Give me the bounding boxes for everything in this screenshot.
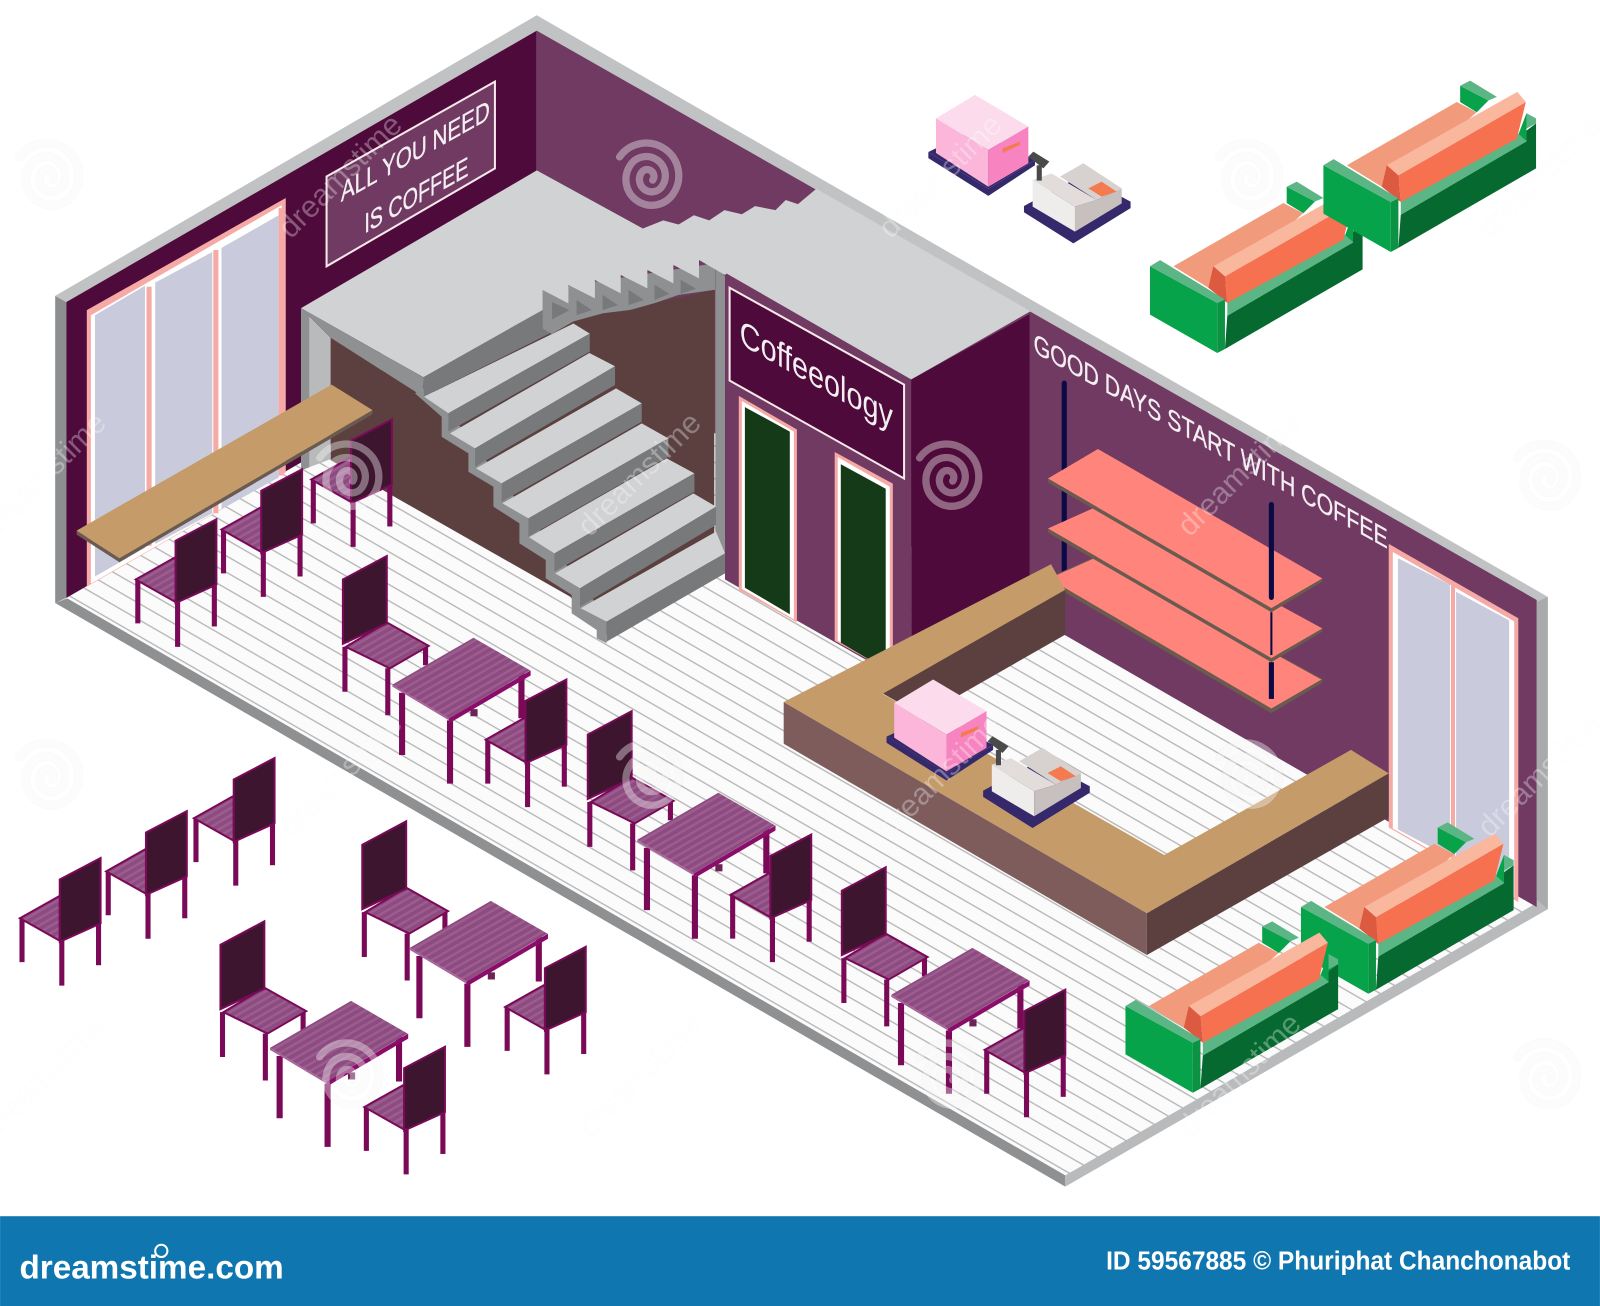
standalone dining set lower — [220, 921, 445, 1174]
dining set 3 — [842, 867, 1065, 1117]
left wall — [66, 31, 537, 598]
watermark wordmarks: dreamstime — [272, 108, 409, 245]
staircase — [415, 310, 725, 643]
cash box on counter — [887, 680, 993, 781]
door left — [739, 396, 797, 622]
door wall — [725, 275, 911, 686]
watermark wordmarks: dreamstime — [872, 707, 1009, 844]
sign: coffeeology — [730, 288, 904, 479]
back wall — [537, 31, 1537, 907]
right stair pillar — [715, 263, 725, 577]
footer credit: ID 59567885 © Phuriphat Chanchonabot — [1106, 1247, 1571, 1275]
pillar side — [911, 314, 1030, 686]
shelf unit — [1048, 381, 1322, 713]
dining set 1 — [343, 556, 566, 807]
watermark wordmarks: dreamstime — [272, 707, 409, 844]
standalone dining set upper — [362, 821, 586, 1074]
right window — [1389, 544, 1518, 902]
footer logo: dreamstime.com — [19, 1249, 284, 1286]
watermark wordmarks: dreamstime — [571, 1007, 708, 1144]
watermark wordmarks: dreamstime — [872, 108, 1009, 245]
sign: all you need is coffee: IS COFFEE — [364, 151, 468, 240]
upper platform — [301, 170, 1031, 380]
left window — [87, 198, 286, 587]
dining set 2 — [588, 711, 811, 962]
sofa standalone front — [1150, 182, 1363, 353]
watermark wordmarks — [0, 108, 1600, 1144]
cash register standalone — [1024, 152, 1131, 243]
bar chairs — [136, 419, 392, 647]
room sofa back — [1301, 822, 1514, 994]
watermark wordmarks: dreamstime — [1171, 406, 1308, 543]
cash box standalone — [928, 95, 1035, 196]
sofa standalone back — [1323, 81, 1536, 252]
footer bar — [0, 1216, 1600, 1306]
service counter — [784, 564, 1389, 955]
watermark wordmarks: dreamstime — [1171, 1007, 1308, 1144]
door right — [835, 452, 893, 673]
wall text: GOOD DAYS START WITH COFFEE — [1034, 328, 1388, 555]
underside stair teeth — [543, 263, 715, 334]
standalone chairs row — [20, 758, 275, 986]
left pillar under platform — [301, 308, 424, 470]
sign: coffeeology: Coffeeology — [740, 312, 893, 438]
striped floor — [66, 326, 1537, 1175]
watermark wordmarks: dreamstime — [571, 406, 708, 543]
bar plank — [77, 385, 372, 562]
sign: all you need is coffee: ALL YOU NEED — [341, 94, 490, 209]
sign: all you need is coffee — [327, 82, 495, 266]
room sofa front — [1125, 921, 1338, 1093]
under-stair brown wall — [331, 290, 714, 635]
cash register on counter — [983, 736, 1090, 828]
watermark spirals — [5, 130, 1589, 1115]
